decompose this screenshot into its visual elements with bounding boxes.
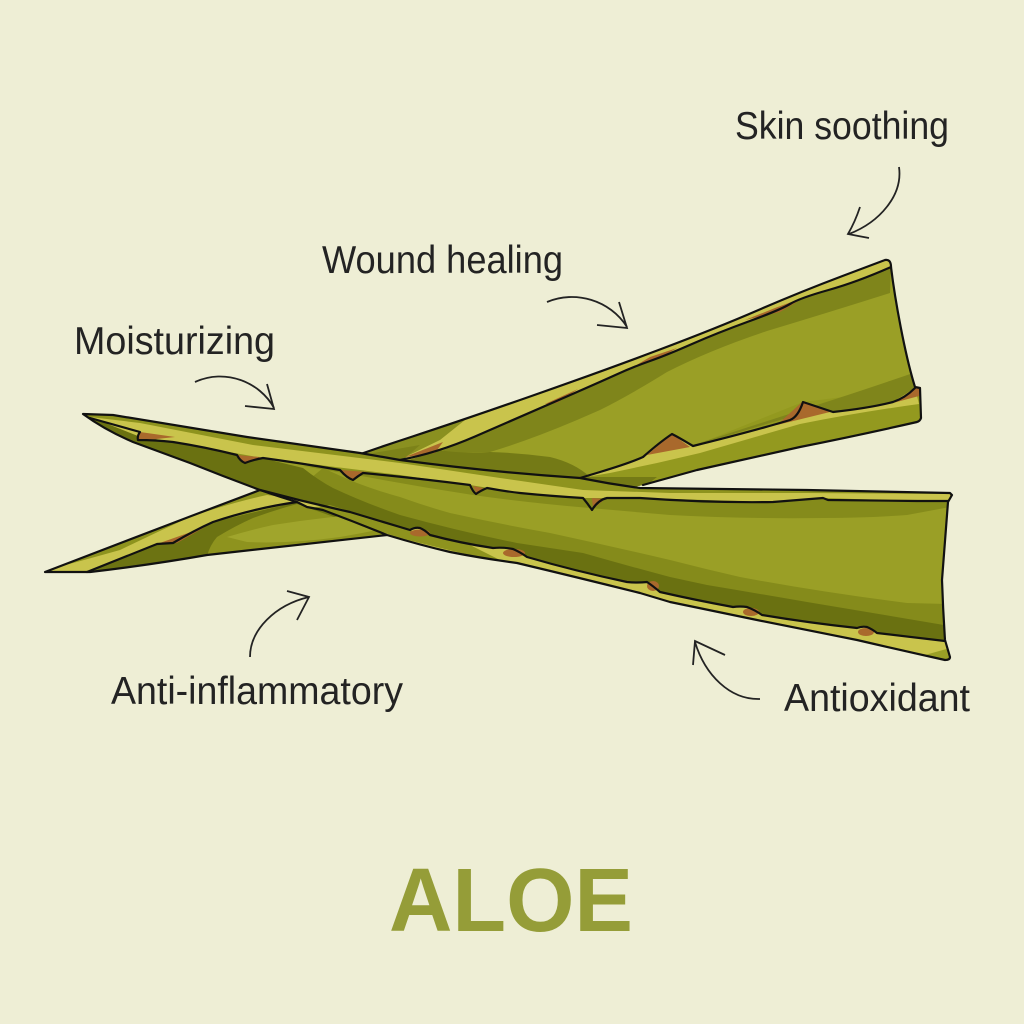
medium band under top lip [303, 466, 950, 518]
shadow on lower right [690, 372, 916, 446]
shadow cast by front leaf [408, 450, 657, 486]
top lip [405, 261, 890, 460]
top lip [88, 416, 950, 496]
dark band lower [88, 416, 944, 640]
label: Antioxidant: Antioxidant [784, 677, 970, 720]
infographic: aloe benefits [44, 110, 970, 932]
leaf outline [83, 414, 952, 660]
leaf outline [45, 260, 921, 572]
arrow: Moisturizing [195, 376, 274, 409]
lower lip [636, 485, 642, 486]
title: ALOE [389, 851, 633, 951]
thorns on back leaf [157, 297, 921, 544]
label: Wound healing: Wound healing [322, 239, 563, 282]
arrow: Anti-inflammatory [250, 591, 309, 657]
label: Skin soothing: Skin soothing [735, 105, 949, 148]
label: Moisturizing: Moisturizing [74, 320, 275, 363]
yellow stripe of lower lip [580, 388, 919, 478]
medium band lower [314, 469, 943, 625]
arrow: Wound healing [547, 297, 627, 328]
dark band under the top lip [437, 267, 891, 453]
thorns on front leaf [138, 432, 874, 636]
left inner dark [94, 503, 375, 570]
arrow: Skin soothing [848, 167, 899, 238]
illustration: back aloe leaf [44, 258, 922, 574]
illustration: front aloe leaf [82, 412, 954, 662]
left outer lip [71, 492, 272, 564]
lower lip [290, 498, 946, 655]
arrow: Antioxidant [693, 641, 760, 699]
label: Anti-inflammatory: Anti-inflammatory [111, 670, 403, 713]
